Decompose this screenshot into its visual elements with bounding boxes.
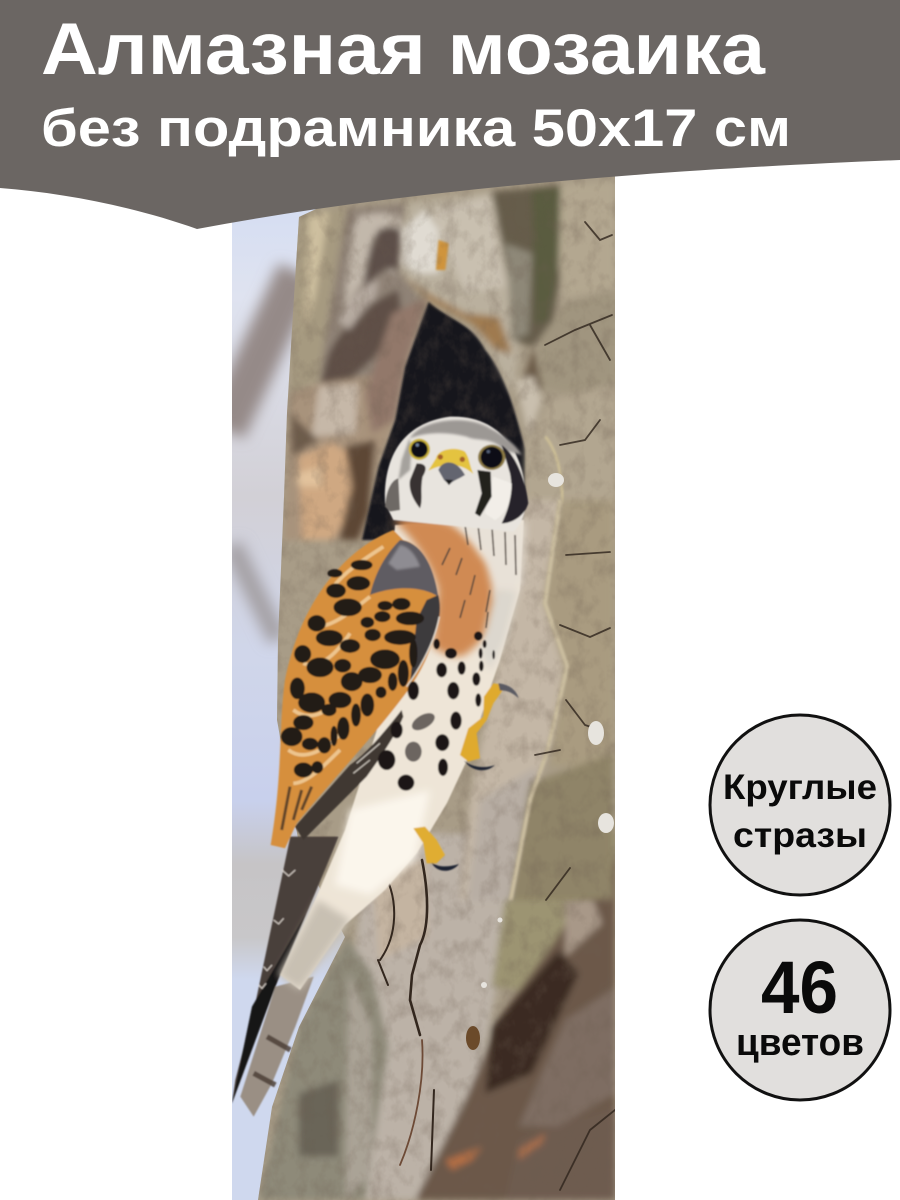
olive bark right bbox=[490, 898, 566, 990]
lower bark, zoom coordinates bbox=[259, 833, 615, 1200]
badge: round rhinestones: стразы bbox=[733, 816, 867, 855]
wing tip bars bbox=[282, 787, 312, 830]
white cheek panel bbox=[485, 477, 512, 520]
left olive strip bbox=[289, 210, 315, 377]
white belly feather glow bbox=[335, 790, 430, 895]
white chest with streaks bbox=[442, 518, 525, 672]
right malar stripe bbox=[475, 470, 492, 517]
pale plate above hollow bbox=[400, 192, 519, 393]
lower left bark bbox=[282, 375, 389, 538]
dark right nape bbox=[502, 445, 528, 523]
orange chest bbox=[393, 517, 501, 656]
pale feather bands bbox=[288, 547, 383, 783]
grey cheek bbox=[385, 478, 400, 512]
badge: 46 colours: 46 bbox=[761, 946, 838, 1029]
badge: 46 colours: цветов bbox=[736, 1022, 864, 1064]
mid right bark, zoom coordinates bbox=[460, 500, 613, 900]
knot bbox=[466, 1026, 480, 1050]
photo: kestrel at tree hollow bbox=[225, 150, 615, 1200]
lower foot bbox=[413, 827, 459, 871]
upper bark, zoom coordinates bbox=[284, 182, 615, 540]
dark wing spots bbox=[282, 561, 423, 777]
swirl bark bbox=[319, 203, 419, 380]
badge: round rhinestones: Круглые bbox=[723, 768, 877, 807]
left eye bbox=[409, 439, 430, 460]
lower body and tail, zoom coordinates bbox=[232, 837, 339, 1117]
gold bark ridge bbox=[544, 436, 564, 500]
hollow rim mottled bbox=[365, 297, 429, 433]
fine bark grain bbox=[232, 150, 615, 1200]
orange resin patch bbox=[436, 240, 449, 270]
grey lower rump shade bbox=[278, 900, 350, 990]
title: Алмазная мозаика bbox=[41, 9, 767, 90]
kestrel bbox=[232, 417, 528, 1117]
right plates bbox=[559, 182, 615, 298]
tree trunk bbox=[232, 150, 615, 1200]
grey crown bbox=[410, 420, 522, 455]
grey coverts lower edge bbox=[295, 710, 403, 840]
hollow bbox=[362, 302, 525, 540]
badge: round rhinestones bbox=[710, 715, 890, 895]
hollow crack in lower bark bbox=[378, 860, 434, 1170]
left malar stripe bbox=[410, 463, 426, 508]
header banner bbox=[0, 0, 900, 229]
head, zoom coordinates bbox=[385, 417, 528, 532]
grey shoulder bbox=[370, 540, 438, 597]
grey temple left bbox=[398, 438, 412, 480]
bark cracks bbox=[535, 222, 615, 1190]
barred tail feathers bbox=[240, 977, 314, 1117]
cere bbox=[428, 449, 473, 474]
badge: 46 colours bbox=[710, 920, 890, 1100]
dark right bark bbox=[415, 853, 615, 1200]
breast spots bbox=[378, 631, 495, 791]
beak bbox=[438, 462, 465, 485]
belly and breast bbox=[280, 520, 524, 990]
subtitle: без подрамника 50х17 см bbox=[41, 99, 791, 158]
sky background bbox=[232, 209, 345, 1200]
dark primaries bbox=[232, 837, 339, 1103]
white chevrons bbox=[259, 870, 295, 988]
wing and spots, zoom coordinates bbox=[271, 530, 519, 871]
white wing edge bbox=[407, 617, 439, 687]
orange wing bbox=[271, 530, 438, 848]
dark mossy strip bbox=[492, 185, 565, 347]
head base bbox=[385, 417, 526, 532]
upper foot bbox=[460, 683, 519, 770]
blurred background branches bbox=[225, 272, 298, 640]
light bark flecks bbox=[481, 473, 614, 988]
grey breast smudges bbox=[405, 710, 438, 762]
right eye bbox=[478, 445, 505, 470]
pale bark ridge bbox=[511, 500, 567, 900]
